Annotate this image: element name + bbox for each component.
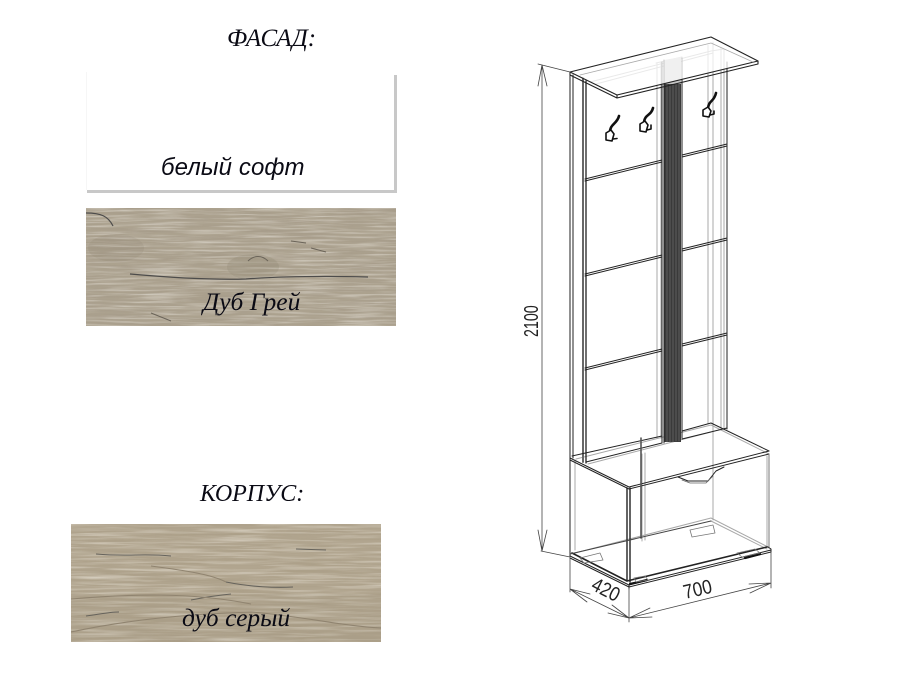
dimension: depth 420 <box>570 558 629 622</box>
coat hooks <box>606 93 716 141</box>
side panel and back panel <box>570 62 727 556</box>
swatch: grey oak <box>86 208 396 326</box>
label: grey oak body: дуб серый <box>182 603 290 632</box>
bench cabinet <box>570 423 771 589</box>
back panel ghost lines <box>573 42 769 553</box>
central strip <box>662 57 682 443</box>
hook 3 <box>703 93 716 117</box>
drawer base <box>570 547 771 587</box>
hook 1 <box>606 116 619 141</box>
feet <box>580 525 760 582</box>
heading: body: КОРПУС: <box>200 481 304 507</box>
dimension: width 700 <box>629 552 771 618</box>
swatch: white soft <box>86 72 397 193</box>
top shelf <box>570 37 758 98</box>
label: grey oak: Дуб Грей <box>203 287 300 316</box>
dimension: depth 420: 420 <box>588 573 624 606</box>
dimension: height 2100 <box>520 64 570 557</box>
dimension: width 700: 700 <box>681 575 714 603</box>
dimension: height 2100: 2100 <box>520 305 543 337</box>
hook 2 <box>640 108 653 132</box>
swatch: grey oak body <box>71 524 381 642</box>
label: white soft: белый софт <box>161 154 305 181</box>
heading: facade: ФАСАД: <box>227 25 316 52</box>
